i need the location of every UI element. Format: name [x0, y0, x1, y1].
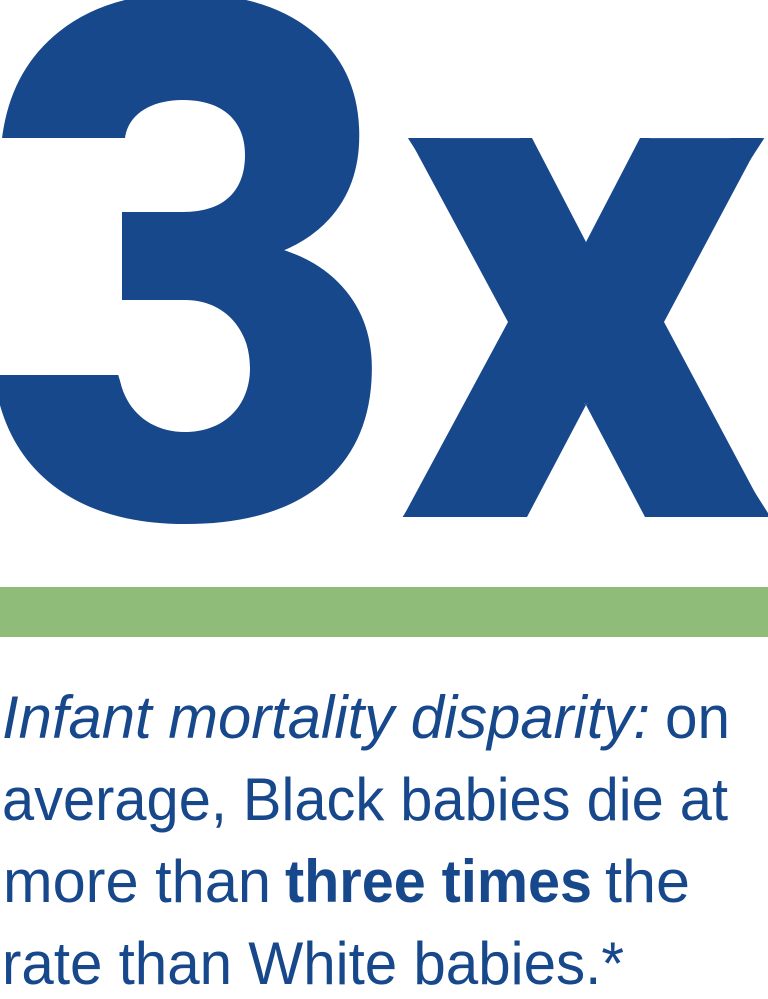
- description text: the: [605, 848, 690, 915]
- description text: more than: [3, 848, 271, 915]
- description text: Infant mortality disparity:: [2, 684, 650, 751]
- green divider bar: [0, 587, 768, 637]
- description text: on: [665, 684, 730, 751]
- description text: [2, 684, 730, 997]
- big stat: 3x: [0, 0, 768, 657]
- description text: average, Black babies die at: [2, 766, 728, 833]
- description text: rate than White babies.*: [2, 930, 624, 997]
- description text: three times: [285, 848, 592, 915]
